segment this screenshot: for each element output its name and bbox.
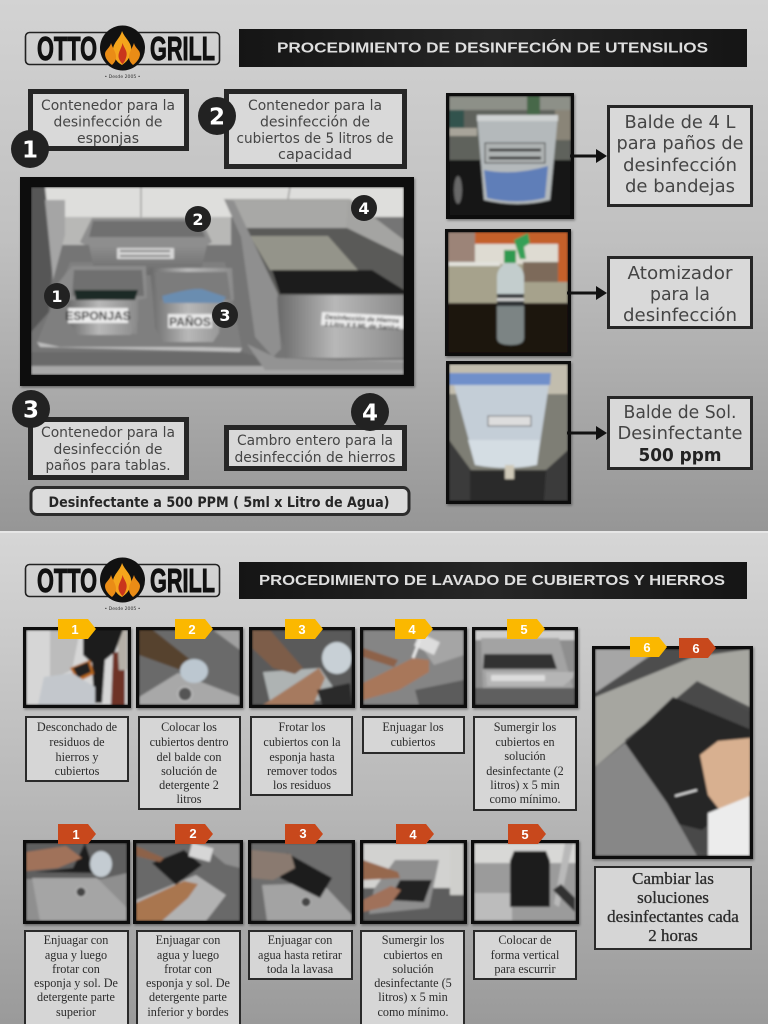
step 5 photo: sumergir	[472, 627, 578, 708]
label: atomizador: desinfección	[623, 305, 737, 326]
caption: sumergir 5 litros: desinfectante (5	[374, 976, 452, 990]
caption: enjuagar inferior: frotar con	[164, 962, 212, 976]
caption: enjuagar inferior: agua y luego	[157, 948, 219, 962]
label: balde de 4 L: de bandejas	[625, 176, 735, 197]
caption: enjuagar superior: agua y luego	[45, 948, 107, 962]
tags: red step numbers: 4	[409, 827, 417, 842]
callout 4: hierros: Cambro entero para la	[237, 433, 393, 449]
label: balde de solución	[608, 398, 752, 468]
step 4 photo: sumergir hierros	[360, 840, 467, 924]
caption: enjuagar	[363, 717, 464, 753]
caption: colocar: litros	[176, 792, 202, 806]
callout 2: cubiertos: 2	[209, 104, 225, 130]
caption: cambiar soluciones: soluciones	[637, 888, 709, 907]
caption: enjuagar inferior: detergente parte	[149, 990, 227, 1004]
background: top panel	[0, 0, 768, 531]
caption: colocar: cubiertos dentro	[150, 735, 228, 749]
step 5 photo: escurrir	[471, 840, 579, 924]
photo: four stainless containers: Desinfección de Hierros	[325, 314, 400, 325]
banner: disinfectant ratio	[31, 488, 409, 514]
caption: frotar	[251, 717, 352, 795]
arrow: bottle to label	[567, 286, 607, 300]
photo: 4 L bucket	[446, 93, 574, 219]
step row: hierros	[23, 840, 579, 924]
photo: four stainless containers: ESPONJAS	[65, 309, 131, 323]
callout 1: esponjas: esponjas	[77, 131, 139, 147]
photo: dispenser bucket	[446, 361, 571, 504]
callout 3: paños: 3	[23, 398, 39, 424]
tags: red step numbers: 1	[72, 827, 80, 842]
logo: Otto Grill top: OTTO	[37, 30, 97, 67]
caption: escurrir: Colocar de	[498, 933, 552, 947]
callout 4: hierros: desinfección de hierros	[234, 450, 396, 466]
title bar top: PROCEDIMIENTO DE DESINFECIÓN DE UTENSILIOS	[277, 38, 708, 56]
caption: sumergir 5 litros: solución	[392, 962, 434, 976]
caption: cambiar soluciones: Cambiar las	[632, 869, 714, 888]
photo: four stainless containers: 3	[219, 306, 231, 325]
caption: desconchado: hierros y	[56, 750, 99, 764]
caption: enjuagar superior	[25, 931, 128, 1024]
callout 3: paños: Contenedor para la	[41, 425, 175, 441]
caption: enjuagar superior: esponja y sol. De	[34, 976, 118, 990]
step 6 photo: big tub	[592, 646, 753, 859]
label: balde de solución: Balde de Sol.	[624, 402, 736, 423]
callout 1: esponjas	[11, 92, 186, 168]
caption: enjuagar: Enjuagar los	[382, 720, 444, 734]
photo: four stainless containers: 4	[358, 199, 370, 218]
tags: yellow step numbers: 2	[188, 622, 196, 637]
logo: Otto Grill bottom: OTTO	[37, 562, 97, 599]
caption: escurrir: para escurrir	[494, 962, 556, 976]
tags: yellow step numbers: 4	[408, 622, 416, 637]
caption: enjuagar inferior: esponja y sol. De	[146, 976, 230, 990]
caption: enjuagar inferior: Enjuagar con	[156, 933, 220, 947]
caption: sumergir 2 litros: Sumergir los	[494, 720, 556, 734]
caption: sumergir 5 litros: litros) x 5 min	[378, 990, 448, 1004]
caption: escurrir: forma vertical	[491, 948, 560, 962]
photo: spray bottle	[445, 229, 571, 356]
caption: desconchado	[26, 717, 128, 781]
caption: cambiar soluciones: 2 horas	[648, 926, 698, 945]
caption: desconchado: cubiertos	[55, 764, 100, 778]
caption: desconchado: residuos de	[49, 735, 105, 749]
step 2 photo: balde	[136, 627, 243, 708]
caption: sumergir 2 litros: litros) x 5 min	[490, 778, 560, 792]
label: balde de 4 L: desinfección	[623, 155, 737, 176]
logo: Otto Grill bottom	[26, 558, 220, 612]
caption: frotar: esponja hasta	[269, 750, 335, 764]
tags: red step numbers: 3	[299, 826, 307, 841]
logo: Otto Grill top	[26, 26, 220, 80]
tags: red step numbers: 6	[692, 641, 700, 656]
title bar bottom	[239, 562, 747, 599]
tags: yellow step numbers: 3	[298, 622, 306, 637]
callout 2: cubiertos: Contenedor para la	[248, 98, 382, 114]
banner: disinfectant ratio: Desinfectante a 500 PPM ( 5ml x Litro de Agua)	[48, 495, 390, 511]
caption: retirar lavasa	[249, 931, 352, 979]
tags: yellow step numbers: 6	[643, 640, 651, 655]
label: atomizador	[608, 258, 752, 328]
background: bottom panel	[0, 533, 768, 1024]
caption: enjuagar superior: superior	[56, 1005, 96, 1019]
caption: sumergir 2 litros: solución	[504, 749, 546, 763]
tray	[37, 262, 242, 352]
caption: retirar lavasa: toda la lavasa	[267, 962, 334, 976]
callout 1: esponjas: 1	[22, 138, 38, 164]
label: balde de 4 L: para paños de	[616, 133, 744, 154]
caption: sumergir 2 litros: desinfectante (2	[486, 764, 564, 778]
caption: enjuagar inferior: inferior y bordes	[147, 1005, 229, 1019]
step 4 photo: enjuagar	[360, 627, 467, 708]
caption: sumergir 2 litros	[474, 717, 576, 810]
photo: four stainless containers: 1	[51, 287, 63, 306]
label: balde de 4 L	[608, 106, 752, 206]
callout 2: cubiertos: capacidad	[278, 147, 352, 163]
caption: enjuagar superior: detergente parte	[37, 990, 115, 1004]
caption: retirar lavasa: agua hasta retirar	[258, 948, 342, 962]
photo: four stainless containers	[20, 177, 414, 386]
caption: frotar: cubiertos con la	[263, 735, 341, 749]
logo: Otto Grill top: GRILL	[150, 30, 215, 67]
photo: four stainless containers: 2	[192, 210, 204, 229]
pan 1	[46, 266, 147, 334]
caption: enjuagar superior: frotar con	[52, 962, 100, 976]
callout 3: paños: paños para tablas.	[46, 458, 170, 474]
caption: cambiar soluciones: desinfectantes cada	[607, 907, 739, 926]
step 2 photo: enjuagar inferior	[133, 840, 243, 924]
title bar top	[239, 29, 747, 67]
caption: sumergir 5 litros	[361, 931, 464, 1024]
caption: sumergir 5 litros: cubiertos en	[383, 948, 443, 962]
tags: red step numbers: 2	[189, 826, 197, 841]
callout 2: cubiertos	[198, 92, 404, 166]
caption: colocar: Colocar los	[161, 720, 217, 734]
caption: sumergir 5 litros: Sumergir los	[382, 933, 444, 947]
caption: escurrir	[474, 931, 576, 979]
arrow: bucket to label	[570, 149, 607, 163]
label: atomizador: Atomizador	[628, 263, 733, 284]
pan 3	[150, 268, 234, 342]
callout 3: paños: desinfección de	[54, 442, 163, 458]
caption: sumergir 2 litros: como mínimo.	[489, 792, 561, 806]
callout 4: hierros	[226, 393, 404, 468]
caption: sumergir 5 litros: como mínimo.	[377, 1005, 449, 1019]
arrow: dispenser to label	[567, 426, 607, 440]
callout 4: hierros: 4	[362, 400, 378, 426]
title bar bottom: PROCEDIMIENTO DE LAVADO DE CUBIERTOS Y HIERROS	[259, 572, 725, 589]
caption: colocar: del balde con	[157, 750, 221, 764]
pan 4	[224, 199, 404, 295]
callout 1: esponjas: Contenedor para la	[41, 98, 175, 114]
tags: yellow step numbers: 1	[71, 622, 79, 637]
label: balde de solución: 500 ppm	[638, 445, 722, 466]
caption: cambiar soluciones	[595, 867, 751, 949]
label: balde de 4 L: Balde de 4 L	[624, 112, 736, 133]
callout 1: esponjas: desinfección de	[54, 114, 163, 130]
logo: Otto Grill bottom: • Desde 2005 •	[104, 606, 141, 612]
tags: yellow step numbers: 5	[520, 622, 528, 637]
caption: frotar: los residuos	[273, 778, 331, 792]
caption: desconchado: Desconchado de	[37, 720, 117, 734]
callout 2: cubiertos: cubiertos de 5 litros de	[236, 131, 394, 147]
caption: enjuagar: cubiertos	[391, 735, 436, 749]
tags: yellow step numbers	[58, 619, 667, 657]
caption: enjuagar superior: Enjuagar con	[44, 933, 108, 947]
pan 2	[80, 218, 212, 245]
logo: Otto Grill bottom: GRILL	[150, 562, 215, 599]
tags: red step numbers	[58, 638, 716, 844]
step 3 photo: retirar lavasa	[248, 840, 355, 924]
caption: colocar: solución de	[161, 764, 217, 778]
callout 3: paños	[12, 390, 186, 478]
label: atomizador: para la	[650, 284, 710, 305]
logo: Otto Grill top: • Desde 2005 •	[104, 74, 141, 80]
caption: retirar lavasa: Enjuagar con	[268, 933, 332, 947]
step 1 photo: desconchado	[23, 627, 131, 708]
callout 2: cubiertos: desinfección de	[260, 114, 370, 130]
caption: sumergir 2 litros: cubiertos en	[495, 735, 555, 749]
step 3 photo: frotar	[249, 627, 355, 708]
label: balde de solución: Desinfectante	[618, 423, 742, 444]
step row: cubiertos	[23, 627, 578, 708]
photo: four stainless containers: 1 Litro X 5 ML de Sanit-c	[324, 321, 400, 332]
caption: frotar: Frotar los	[278, 720, 326, 734]
step 1 photo: enjuagar superior	[23, 840, 130, 924]
tags: red step numbers: 5	[521, 827, 529, 842]
caption: colocar: detergente 2	[159, 778, 219, 792]
photo: four stainless containers: PAÑOS	[169, 314, 211, 329]
caption: enjuagar inferior	[137, 931, 240, 1024]
caption: frotar: remover todos	[267, 764, 337, 778]
caption: colocar	[139, 717, 240, 809]
